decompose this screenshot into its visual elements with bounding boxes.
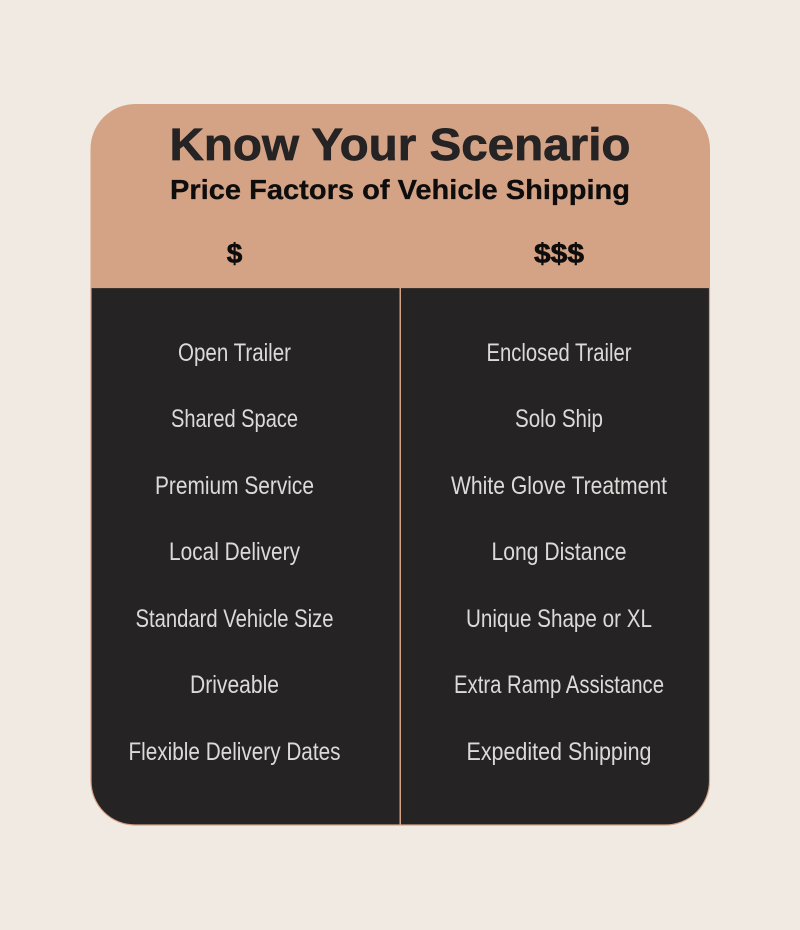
factor: extra ramp assistance: Extra Ramp Assistance bbox=[454, 671, 664, 699]
factor: flexible delivery dates: Flexible Delivery Dates bbox=[128, 738, 340, 766]
subtitle: Price Factors of Vehicle Shipping bbox=[170, 174, 630, 205]
card body bbox=[91, 288, 710, 825]
title: Know Your Scenario bbox=[170, 119, 630, 170]
factor: driveable: Driveable bbox=[190, 671, 279, 699]
column heading: high cost: $$$ bbox=[534, 238, 584, 269]
factor: white glove treatment: White Glove Treatment bbox=[451, 472, 667, 500]
column: higher price factors bbox=[451, 339, 667, 766]
factor: expedited shipping: Expedited Shipping bbox=[466, 738, 652, 766]
factor: local delivery: Local Delivery bbox=[169, 538, 300, 566]
factor: open trailer: Open Trailer bbox=[178, 339, 291, 367]
factor: unique shape or xl: Unique Shape or XL bbox=[466, 605, 652, 633]
factor: solo ship: Solo Ship bbox=[515, 405, 603, 433]
column heading: low cost: $ bbox=[227, 238, 243, 269]
factor: premium service: Premium Service bbox=[155, 472, 314, 500]
factor: long distance: Long Distance bbox=[492, 538, 626, 566]
factor: standard vehicle size: Standard Vehicle Size bbox=[136, 605, 334, 633]
factor: shared space: Shared Space bbox=[171, 405, 298, 433]
column: lower price factors bbox=[128, 339, 340, 766]
card header band bbox=[90, 104, 710, 288]
panel: price factors card bbox=[90, 104, 710, 825]
column divider bbox=[400, 288, 401, 825]
factor: enclosed trailer: Enclosed Trailer bbox=[486, 339, 632, 367]
